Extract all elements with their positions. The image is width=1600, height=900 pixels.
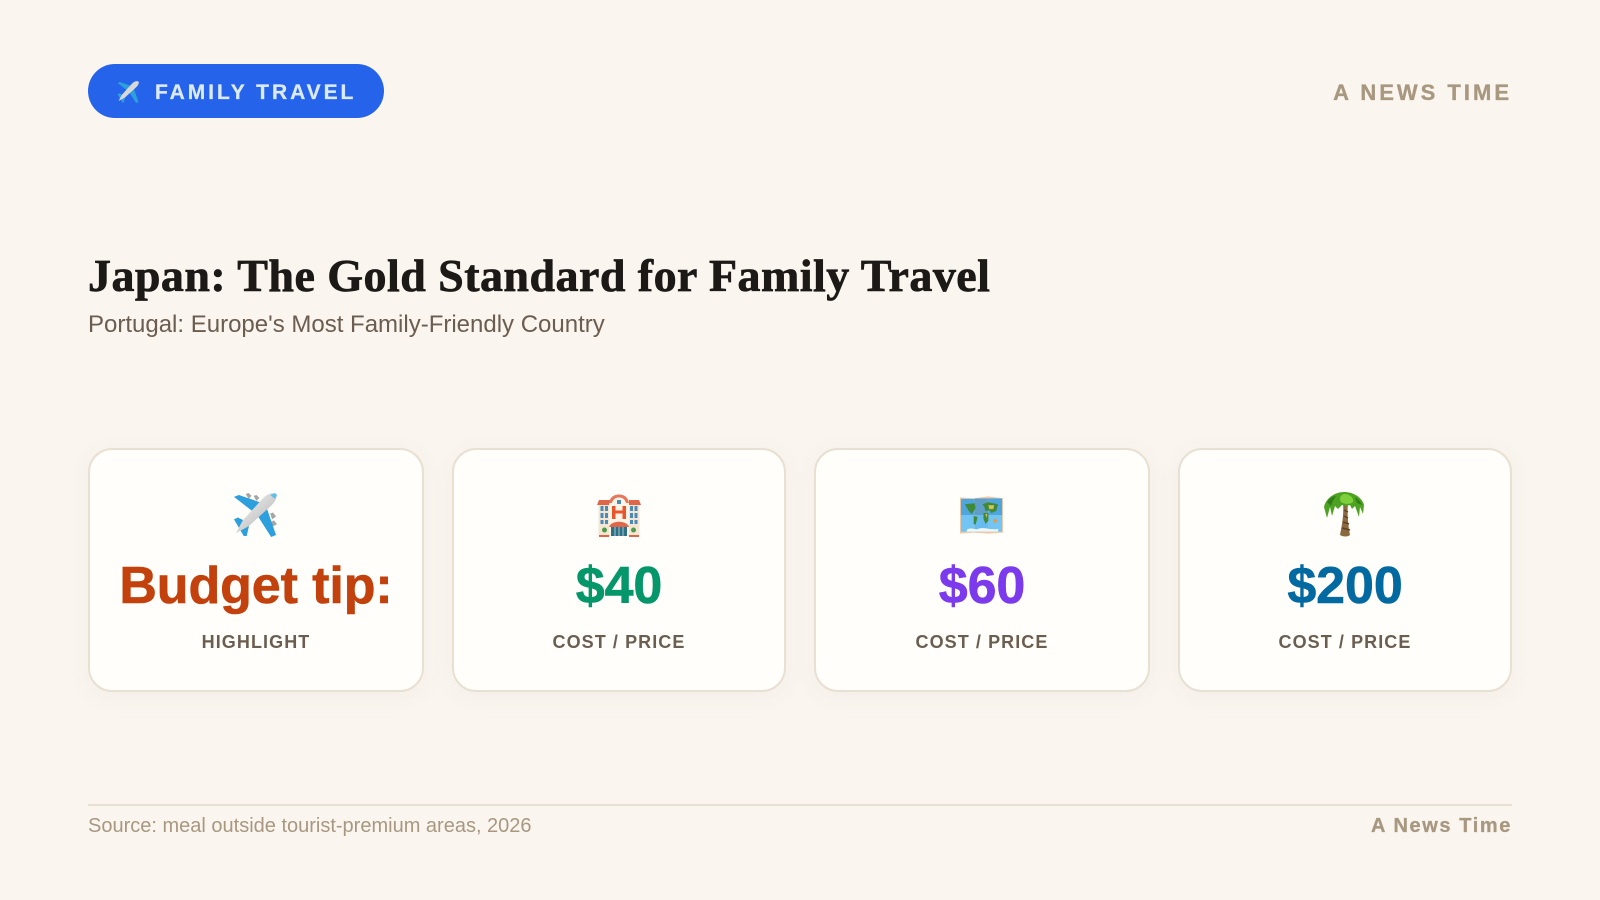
- panel: cost card $60: [814, 448, 1150, 692]
- title: Japan: The Gold Standard for Family Travel: [88, 250, 990, 301]
- panel: budget tip card: [88, 448, 424, 692]
- value: $60: [939, 557, 1025, 615]
- value: $200: [1287, 557, 1403, 615]
- panel: cost card $200: [1178, 448, 1512, 692]
- icon: airplane: [234, 493, 277, 537]
- icon: hotel: [597, 494, 641, 537]
- label: HIGHLIGHT: [202, 632, 310, 652]
- panel: cost card $40: [452, 448, 786, 692]
- source note: Source: meal outside tourist-premium areas, 2026: [88, 815, 532, 837]
- icon: airplane small: [118, 81, 139, 103]
- brand footer: A News Time: [1371, 815, 1512, 837]
- value: Budget tip:: [119, 557, 393, 615]
- value: $40: [576, 557, 662, 615]
- badge: family travel: [88, 64, 384, 118]
- subtitle: Portugal: Europe's Most Family-Friendly Country: [88, 311, 605, 338]
- label: COST / PRICE: [916, 632, 1048, 652]
- label: COST / PRICE: [1278, 632, 1411, 652]
- brand top right: A NEWS TIME: [1333, 80, 1512, 105]
- icon: palm tree: [1324, 492, 1364, 536]
- icon: world map: [960, 496, 1003, 534]
- label: COST / PRICE: [552, 632, 685, 652]
- badge label: FAMILY TRAVEL: [155, 81, 356, 104]
